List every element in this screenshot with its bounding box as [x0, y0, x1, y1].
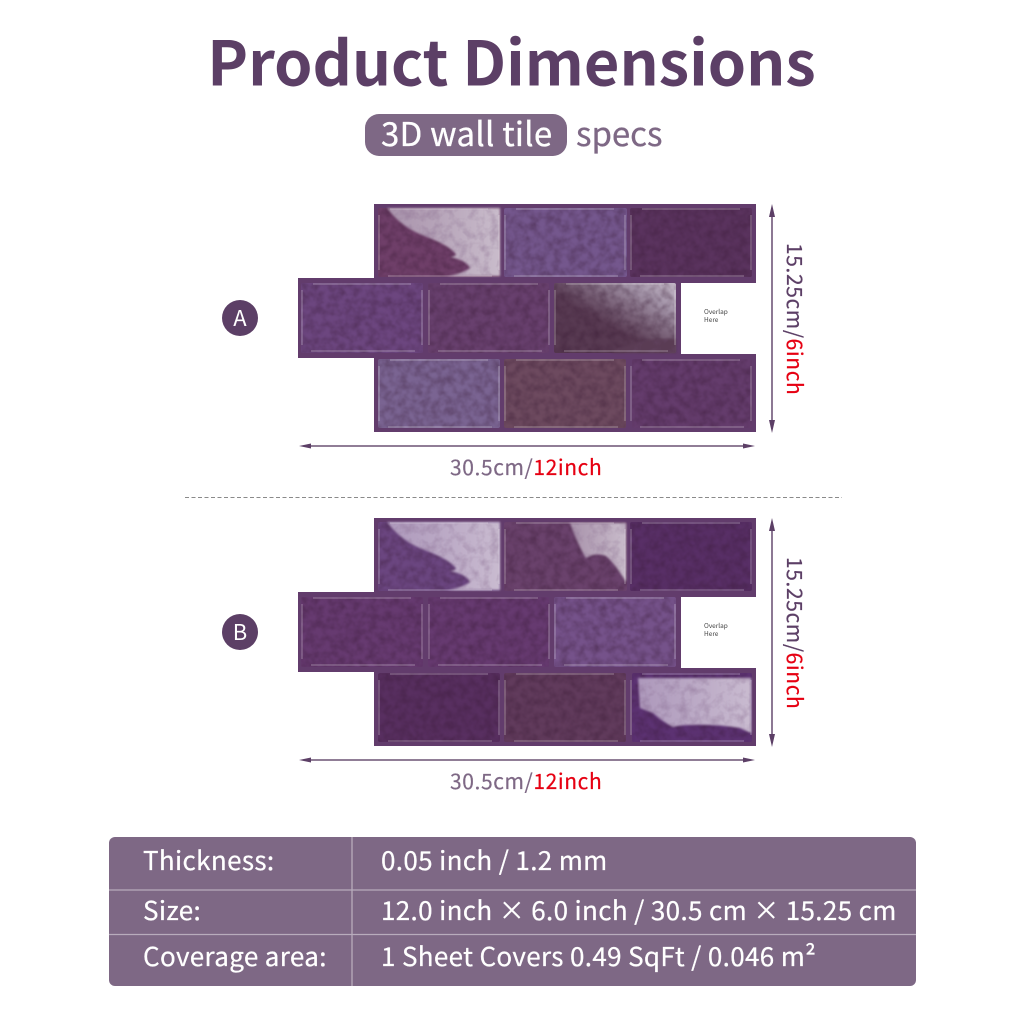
- row: thickness: Thickness:: [143, 841, 274, 878]
- overlap area: Overlap: [704, 620, 728, 630]
- specs table: [109, 837, 916, 986]
- height arrow B: [769, 518, 775, 747]
- badge A: A: [233, 301, 247, 333]
- row: thickness: 0.05 inch / 1.2 mm: [381, 841, 608, 878]
- row: size: Size:: [143, 891, 201, 928]
- subtitle: [365, 108, 662, 156]
- badge A: [222, 300, 258, 336]
- overlap area: [681, 283, 756, 354]
- overlap area: Here: [704, 314, 719, 324]
- panel: tile sheet A: [298, 204, 756, 432]
- overlap area: Here: [704, 628, 719, 638]
- badge B: B: [233, 615, 247, 647]
- title: Product Dimensions: [207, 14, 816, 104]
- row 3 tiles: [378, 359, 752, 428]
- row 3 tiles: [378, 673, 752, 742]
- row: coverage area: 1 Sheet Covers 0.49 SqFt / 0.046 m²: [381, 937, 816, 974]
- overlap area: Overlap: [704, 306, 728, 316]
- width arrow A: [299, 444, 755, 448]
- subtitle pill: [365, 114, 567, 156]
- height label A: 15.25cm/ 6inch: [780, 243, 810, 395]
- width arrow B: [299, 758, 755, 762]
- pill text: 3D wall tile: [381, 108, 552, 156]
- panel: tile sheet B: [298, 518, 756, 746]
- row: thickness: [143, 841, 608, 878]
- overlap area: [681, 597, 756, 668]
- specs text: specs: [576, 108, 662, 156]
- height arrow A: [769, 204, 775, 433]
- row 1 tiles: [378, 522, 752, 591]
- width label A: 30.5cm/12inch: [450, 452, 602, 482]
- row: size: [143, 891, 897, 928]
- row 1 tiles: [378, 208, 752, 277]
- badge B: [222, 614, 258, 650]
- row: coverage area: Coverage area:: [143, 937, 327, 974]
- row 2 tiles: [301, 283, 676, 353]
- row 2 tiles: [301, 597, 676, 667]
- height label B: 15.25cm/ 6inch: [780, 557, 810, 709]
- row: size: 12.0 inch × 6.0 inch / 30.5 cm × 15.25 cm: [381, 891, 897, 928]
- row: coverage area: [143, 937, 816, 974]
- width label B: 30.5cm/12inch: [450, 766, 602, 796]
